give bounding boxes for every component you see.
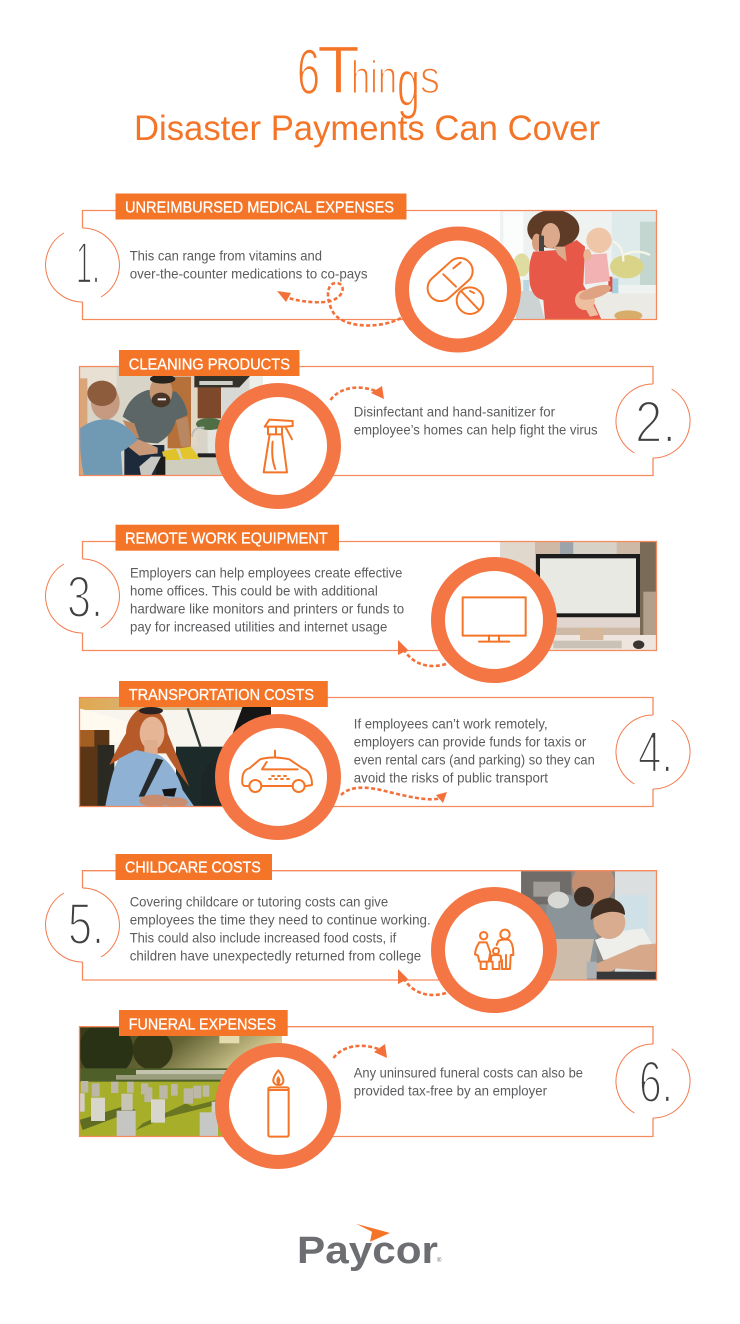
body text: home offices. This could be with additional [130,582,378,598]
panel border [82,210,656,320]
numeral 3: 3. [67,565,103,630]
body text: If employees can’t work remotely, [354,715,548,731]
photo: father and child [521,871,656,980]
body text: children have unexpectedly returned from college [130,948,421,964]
icon circle [222,721,334,833]
number circle 1 [46,228,119,302]
photo: woman in car [79,697,273,808]
number circle 2 [616,384,690,458]
title: 6 Things: g [397,46,420,120]
heading tab: REMOTE WORK EQUIPMENT [125,530,328,547]
title: 6 Things: 6 [297,36,320,108]
number circle 3 [46,559,119,633]
title: 6 Things: hin [351,51,397,103]
numeral 2: 2. [635,390,676,455]
icon: spray bottle [264,420,293,472]
body text: This could also include increased food costs, if [130,930,396,946]
panel 1: unreimbursed medical expenses [46,194,657,346]
body text: even rental cars (and parking) so they can [354,751,595,767]
body text [130,564,404,634]
heading tab [119,1010,288,1036]
numeral 5: 5. [68,892,104,957]
panel 2: cleaning products [79,350,690,502]
body text: over-the-counter medications to co-pays [130,266,368,282]
panel 6: funeral expenses [79,1010,690,1162]
body text: employers can provide funds for taxis or [354,733,587,749]
number circle 5 [46,888,119,962]
body text [130,248,368,282]
title: 6 Things: s [420,51,440,103]
body text: employees the time they need to continue working. [130,912,431,928]
panel 3: remote work equipment [46,525,658,676]
heading tab: CHILDCARE COSTS [125,860,261,877]
icon: pills [422,253,483,314]
body text: provided tax-free by an employer [354,1082,547,1098]
photo: father and son cleaning [79,367,266,477]
body text: This can range from vitamins and [130,248,322,264]
body text: Any uninsured funeral costs can also be [354,1064,583,1080]
photo: cemetery [79,1023,283,1137]
heading tab: FUNERAL EXPENSES [129,1016,276,1033]
body text: avoid the risks of public transport [354,769,548,785]
panel border [80,698,653,806]
numeral 4: 4. [638,720,673,785]
icon: candle [268,1070,289,1137]
body text: hardware like monitors and printers or funds to [130,600,404,616]
icon circle [222,1050,334,1162]
arrow [398,969,446,995]
number circle 4 [616,715,690,789]
icon: family [475,930,513,969]
title: 6 Things: T [317,32,360,108]
logo: Paycor: Paycor [297,1230,438,1272]
arrow [277,283,401,326]
panel border [82,542,656,650]
body text [354,404,598,438]
body text [354,715,595,785]
photo: desktop monitor [498,540,658,652]
arrow [330,386,384,400]
heading tab [119,681,328,707]
title: Disaster Payments Can Cover: Disaster Payments Can Cover [134,109,600,148]
heading tab [119,350,300,376]
photo: mother with baby [500,210,657,321]
arrow [398,640,446,666]
arrow [334,1044,387,1058]
heading tab [116,194,406,220]
body text: Covering childcare or tutoring costs can give [130,894,388,910]
panel border [80,366,653,476]
icon: taxi [242,751,312,792]
arrow [341,788,447,803]
heading tab: UNREIMBURSED MEDICAL EXPENSES [125,200,394,217]
body text: Disinfectant and hand-sanitizer for [354,404,555,420]
body text: pay for increased utilities and internet usage [130,618,387,634]
heading tab [116,854,272,880]
icon circle [438,564,550,676]
icon circle [222,390,334,502]
panel border [80,1027,653,1136]
panel 4: transportation costs [79,681,690,833]
icon: monitor [463,597,526,642]
panel border [82,871,656,980]
body text [354,1064,583,1098]
heading tab: TRANSPORTATION COSTS [129,687,314,704]
panel 5: childcare costs [46,854,658,1006]
icon circle [402,234,514,346]
number circle 6 [616,1044,690,1118]
body text: Employers can help employees create effective [130,564,403,580]
body text: employee’s homes can help fight the virus [354,422,598,438]
logo: Paycor: ® [437,1257,442,1264]
numeral 6: 6. [639,1050,673,1115]
icon circle [438,894,550,1006]
body text [130,894,431,964]
panel 1: unreimbursed medical expenses: 1. [76,231,100,296]
heading tab: CLEANING PRODUCTS [129,356,290,373]
heading tab [116,525,339,551]
